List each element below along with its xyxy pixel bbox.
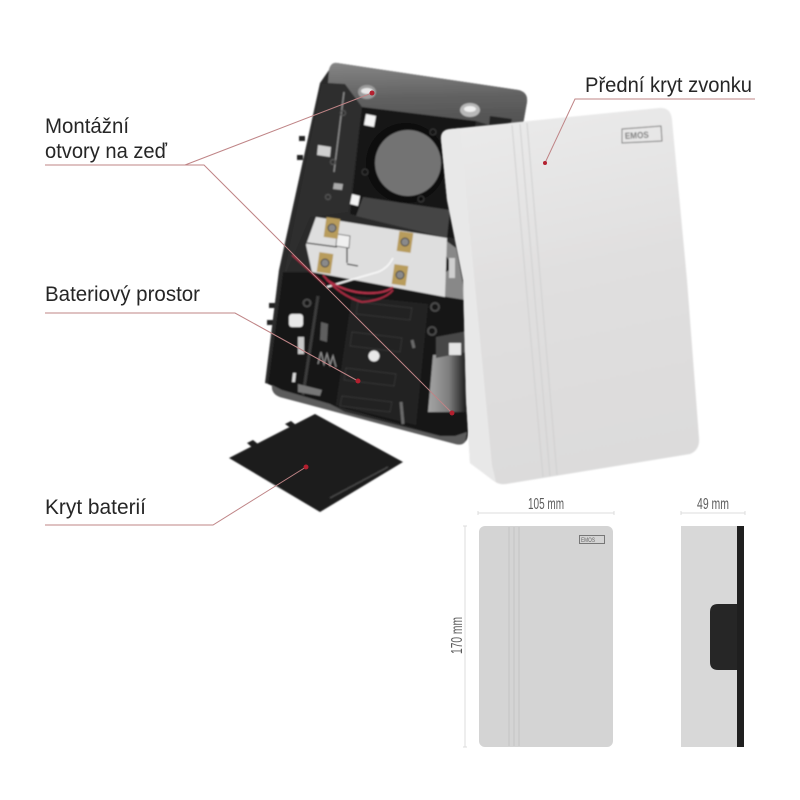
lip opening	[488, 116, 512, 136]
leader: battery space	[45, 313, 358, 381]
lower body	[268, 272, 468, 440]
callout lines	[45, 93, 755, 525]
centre button	[368, 350, 380, 362]
case side knobs	[267, 136, 305, 325]
label: front cover: Přední kryt zvonku	[585, 74, 752, 97]
callout dots	[304, 90, 547, 470]
speaker	[362, 123, 446, 203]
ridges	[512, 123, 557, 477]
photo: open doorbell back case	[265, 63, 527, 445]
label: mounting holes: Montážní	[45, 115, 129, 138]
case shell	[265, 63, 527, 444]
left wall column	[283, 84, 362, 280]
bottom lip	[272, 385, 467, 445]
dimension drawing: side view	[681, 526, 744, 747]
leader: front cover	[545, 99, 755, 163]
contact clips	[320, 322, 328, 342]
bay divider	[303, 296, 318, 395]
label: mounting holes	[45, 115, 168, 163]
battery bay floor	[336, 296, 428, 425]
front ridges	[509, 527, 519, 746]
electronics module	[306, 217, 447, 297]
dimension: width 105 mm	[478, 496, 614, 515]
upper interior	[350, 107, 476, 240]
dimension: height 170 mm: 170 mm	[449, 617, 466, 654]
side body	[681, 526, 738, 747]
dimension drawing: front view	[479, 526, 613, 747]
leader: battery cover	[45, 467, 306, 525]
cover logo: EMOS	[625, 130, 649, 141]
spring	[318, 352, 336, 367]
front cover	[441, 108, 699, 484]
cover left bevel	[441, 128, 496, 482]
screw rings	[304, 300, 310, 306]
side tab right	[440, 240, 466, 300]
label: battery space: Bateriový prostor	[45, 283, 200, 306]
dimension: width 105 mm: 105 mm	[528, 496, 564, 513]
left pillars	[326, 92, 346, 200]
ribbed plate	[356, 197, 450, 238]
notch	[710, 604, 737, 670]
battery cover	[229, 414, 403, 512]
top lip	[328, 63, 527, 135]
metal strip right	[428, 352, 466, 412]
label: battery cover: Kryt baterií	[45, 496, 146, 519]
cover body	[441, 108, 699, 484]
gold terminals	[317, 217, 413, 286]
label: mounting holes: otvory na zeď	[45, 140, 168, 163]
cover slot	[330, 467, 388, 498]
black back strip	[737, 526, 744, 747]
right clamp	[436, 331, 468, 358]
mounting screws	[358, 85, 480, 117]
cover logo	[622, 126, 662, 143]
dimension: height 170 mm	[449, 526, 467, 747]
front panel	[479, 526, 613, 747]
cover tabs	[247, 421, 296, 449]
wires	[292, 255, 393, 302]
leader: mounting holes	[45, 93, 452, 413]
front logo	[580, 536, 604, 544]
front logo: EMOS	[581, 538, 595, 544]
dimension: depth 49 mm	[681, 496, 745, 515]
white pegs	[289, 314, 303, 327]
dimension: depth 49 mm: 49 mm	[697, 496, 729, 513]
white clips	[317, 114, 376, 206]
